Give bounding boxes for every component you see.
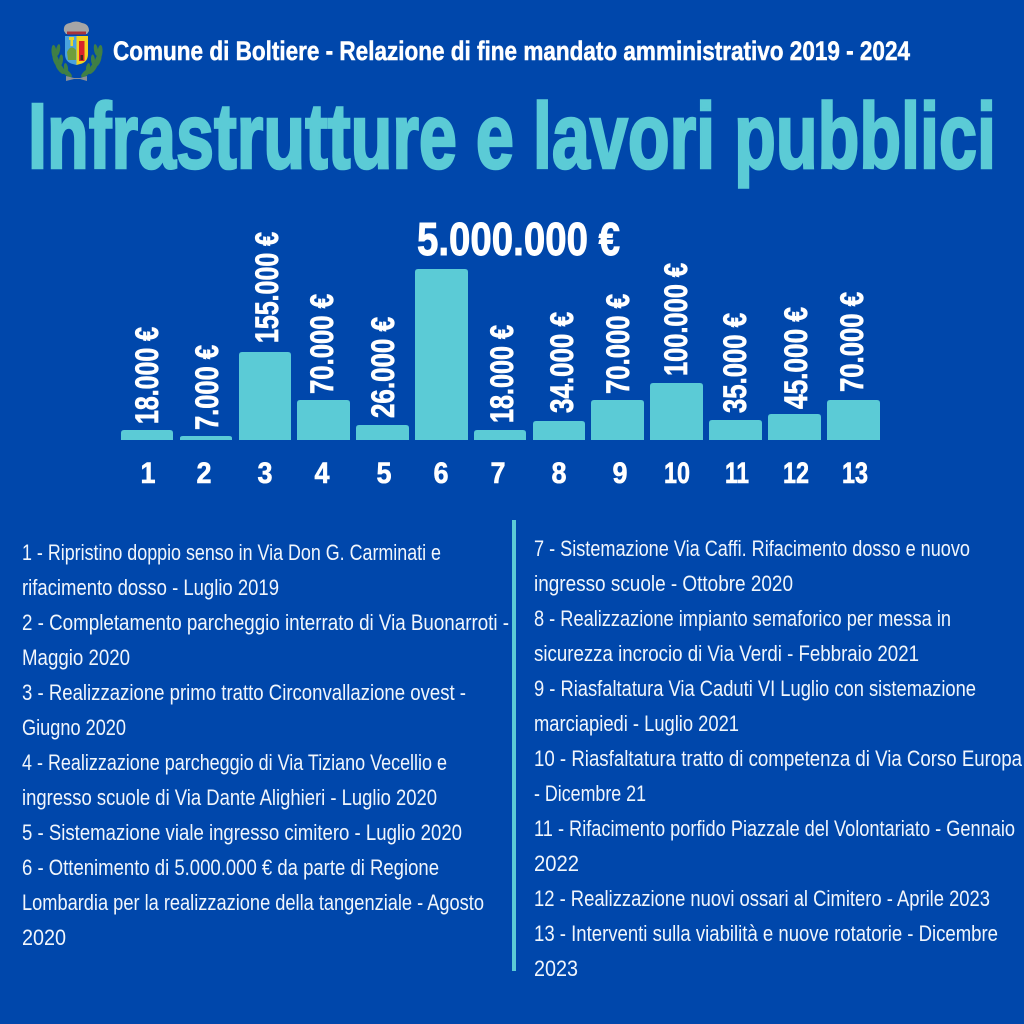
item 13 [534,921,998,981]
bar 13 [827,292,880,490]
bar 4 [297,294,350,490]
item 3 [22,680,466,740]
item 1: rifacimento dosso - Luglio 2019 [22,575,279,600]
item 10 [534,746,1022,806]
bar 10 [650,263,703,490]
item 5: 5 - Sistemazione viale ingresso cimitero - Luglio 2020 [22,820,462,845]
bar 11: 35.000 € [717,313,753,413]
bar 2: 7.000 € [189,345,225,430]
item 2: Maggio 2020 [22,645,130,670]
item 9 [534,676,976,736]
item 2: 2 - Completamento parcheggio interrato di Via Buonarroti - [22,610,509,635]
text block: right column of works [534,536,1022,981]
item 1: 1 - Ripristino doppio senso in Via Don G. Carminati e [22,540,441,565]
bar 9 [591,294,644,490]
bar 12: 45.000 € [778,307,814,409]
item 2 [22,610,509,670]
item 6: 2020 [22,925,66,950]
bar 11: 11 [725,457,749,490]
item 6: 6 - Ottenimento di 5.000.000 € da parte di Regione [22,855,439,880]
bar 8: 8 [552,457,566,490]
bar 4: 4 [314,457,330,490]
bar 6: 6 [434,457,448,490]
item 7 [534,536,970,596]
bar 2: 2 [196,457,212,490]
icon: municipal coat of arms [51,22,103,81]
bar 1: 18.000 € [129,327,165,424]
bar 10: 10 [664,457,690,490]
bar 3 [239,232,291,490]
bar 13: 70.000 € [834,292,870,392]
bar 8: 34.000 € [544,312,580,413]
item 4: ingresso scuole di Via Dante Alighieri - Luglio 2020 [22,785,437,810]
bar 1: 1 [140,457,156,490]
bar 3: 155.000 € [249,232,285,343]
bar 7: 7 [490,457,506,490]
item 3: 3 - Realizzazione primo tratto Circonvallazione ovest - [22,680,466,705]
column divider [512,520,516,971]
item 9: marciapiedi - Luglio 2021 [534,711,739,736]
item 11: 2022 [534,851,579,876]
bar chart [121,213,880,490]
bar 5 [356,317,409,490]
item 4 [22,750,447,810]
item 6: Lombardia per la realizzazione della tangenziale - Agosto [22,890,484,915]
bar 7: 18.000 € [484,325,520,423]
item 3: Giugno 2020 [22,715,126,740]
bar 7 [474,325,526,490]
item 7: ingresso scuole - Ottobre 2020 [534,571,793,596]
bar 11 [709,313,762,490]
item 6 [22,855,484,950]
bar 12 [768,307,821,490]
bar 1 [121,327,173,490]
bar 5: 5 [376,457,392,490]
bar 9: 9 [612,457,628,490]
bar 9: 70.000 € [600,294,636,394]
item 13: 2023 [534,956,578,981]
item 10: - Dicembre 21 [534,781,646,806]
item 11 [534,816,1015,876]
bar 2 [180,345,232,490]
bar 10: 100.000 € [658,263,694,376]
text block: left column of works [22,540,509,950]
bar 4: 70.000 € [304,294,340,394]
bar 3: 3 [258,457,272,490]
item 8: sicurezza incrocio di Via Verdi - Febbraio 2021 [534,641,919,666]
bar 5: 26.000 € [365,317,401,418]
bar 8 [533,312,585,490]
bar 13: 13 [842,457,868,490]
bar 12: 12 [783,457,809,490]
item 4: 4 - Realizzazione parcheggio di Via Tiziano Vecellio e [22,750,447,775]
item 1 [22,540,441,600]
item 8 [534,606,951,666]
bar 6 [415,213,620,490]
bar 6: 5.000.000 € [417,213,620,265]
